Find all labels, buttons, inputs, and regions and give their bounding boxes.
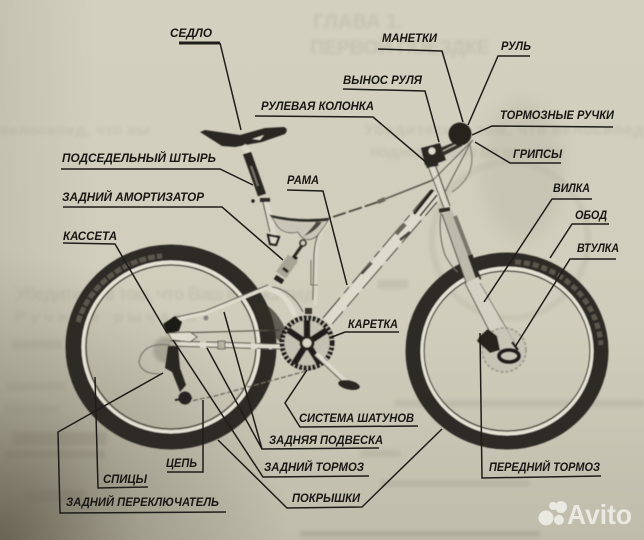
label: вилка: ВИЛКА — [553, 181, 590, 195]
rear triangle stays — [170, 285, 303, 349]
label: обод: ОБОД — [575, 208, 607, 222]
label: система шатунов: СИСТЕМА ШАТУНОВ — [299, 411, 414, 425]
bleed-through text from the reverse page: Ручные рычаги — [15, 309, 195, 326]
label: покрышки — [218, 429, 442, 508]
label: вилка — [484, 181, 592, 302]
label: передний тормоз — [480, 333, 601, 478]
label: задний амортизатор — [62, 188, 283, 260]
label: рама — [287, 173, 347, 285]
chainring and crank — [282, 308, 361, 392]
label: задняя подвеска — [207, 312, 383, 449]
front wheel — [413, 260, 601, 442]
label: цепь: ЦЕПЬ — [166, 456, 197, 470]
bleed-through text from the reverse page: подходит Вам по размеру — [370, 144, 565, 161]
watermark: Avito — [538, 499, 632, 530]
label: руль — [468, 39, 531, 125]
frame down tube — [323, 190, 437, 324]
label: покрышки: ПОКРЫШКИ — [292, 491, 361, 505]
label: вынос руля — [343, 73, 439, 142]
label: система шатунов — [285, 370, 418, 427]
watermark: Avito: Avito — [567, 499, 632, 530]
label: задний тормоз — [173, 340, 369, 477]
label: тормозные ручки: ТОРМОЗНЫЕ РУЧКИ — [500, 108, 615, 122]
frame top tube — [311, 180, 433, 305]
front suspension fork — [442, 212, 516, 353]
label: рулевая колонка: РУЛЕВАЯ КОЛОНКА — [261, 99, 374, 113]
bleed-through text from the reverse page: велосипед, что вы — [0, 122, 150, 139]
label: обод — [550, 208, 609, 258]
saddle — [200, 127, 287, 147]
label: седло: СЕДЛО — [170, 26, 212, 40]
label: седло — [170, 26, 241, 130]
label: манетки — [378, 31, 463, 122]
seat post — [243, 146, 279, 245]
bleed-through text from the reverse page: Убедитесь в том, что Ваш велосипед — [15, 284, 316, 304]
brake cables — [433, 140, 473, 272]
chain — [186, 370, 310, 402]
label: манетки: МАНЕТКИ — [382, 31, 438, 45]
rear derailleur and cassette — [139, 316, 197, 404]
label: задний переключатель — [58, 373, 226, 513]
label: задний амортизатор: ЗАДНИЙ АМОРТИЗАТОР — [62, 188, 205, 204]
front brake disc — [477, 328, 526, 372]
label: спицы: СПИЦЫ — [103, 472, 148, 486]
label: руль: РУЛЬ — [501, 39, 531, 53]
label: каретка: КАРЕТКА — [348, 317, 398, 331]
bicycle illustration — [74, 122, 601, 442]
label: задний тормоз: ЗАДНИЙ ТОРМОЗ — [264, 458, 364, 474]
label: тормозные ручки — [472, 108, 615, 135]
label: подседельный штырь: ПОДСЕДЕЛЬНЫЙ ШТЫРЬ — [62, 149, 216, 165]
label: спицы — [95, 377, 148, 488]
rear wheel — [74, 253, 268, 441]
label: подседельный штырь — [61, 149, 253, 185]
bleed-through text from the reverse page: Убедитесь в том, что велосипед — [364, 122, 644, 139]
rear shock absorber — [275, 240, 306, 282]
label: каретка — [332, 317, 399, 337]
rear suspension link — [270, 215, 330, 240]
label: задний переключатель: ЗАДНИЙ ПЕРЕКЛЮЧАТЕЛЬ — [66, 493, 219, 509]
label: втулка — [515, 241, 619, 347]
label: задняя подвеска: ЗАДНЯЯ ПОДВЕСКА — [269, 433, 383, 447]
label: кассета — [63, 229, 167, 333]
label: грипсы: ГРИПСЫ — [513, 147, 563, 161]
label: вынос руля: ВЫНОС РУЛЯ — [343, 73, 423, 87]
label: втулка: ВТУЛКА — [577, 241, 619, 255]
label: передний тормоз: ПЕРЕДНИЙ ТОРМОЗ — [489, 458, 600, 474]
bleed-through text from the reverse page: ГЛАВА 1. — [313, 11, 403, 33]
bleed-through text from the reverse page: ПЕРВОЙ ПОЕЗДКЕ — [310, 35, 490, 59]
label: рама: РАМА — [287, 173, 319, 187]
label: грипсы — [475, 142, 563, 163]
label: цепь — [166, 400, 203, 472]
label: рулевая колонка — [255, 99, 427, 163]
stem and handlebar — [421, 122, 472, 166]
head tube — [426, 161, 450, 213]
label: кассета: КАССЕТА — [63, 229, 117, 243]
